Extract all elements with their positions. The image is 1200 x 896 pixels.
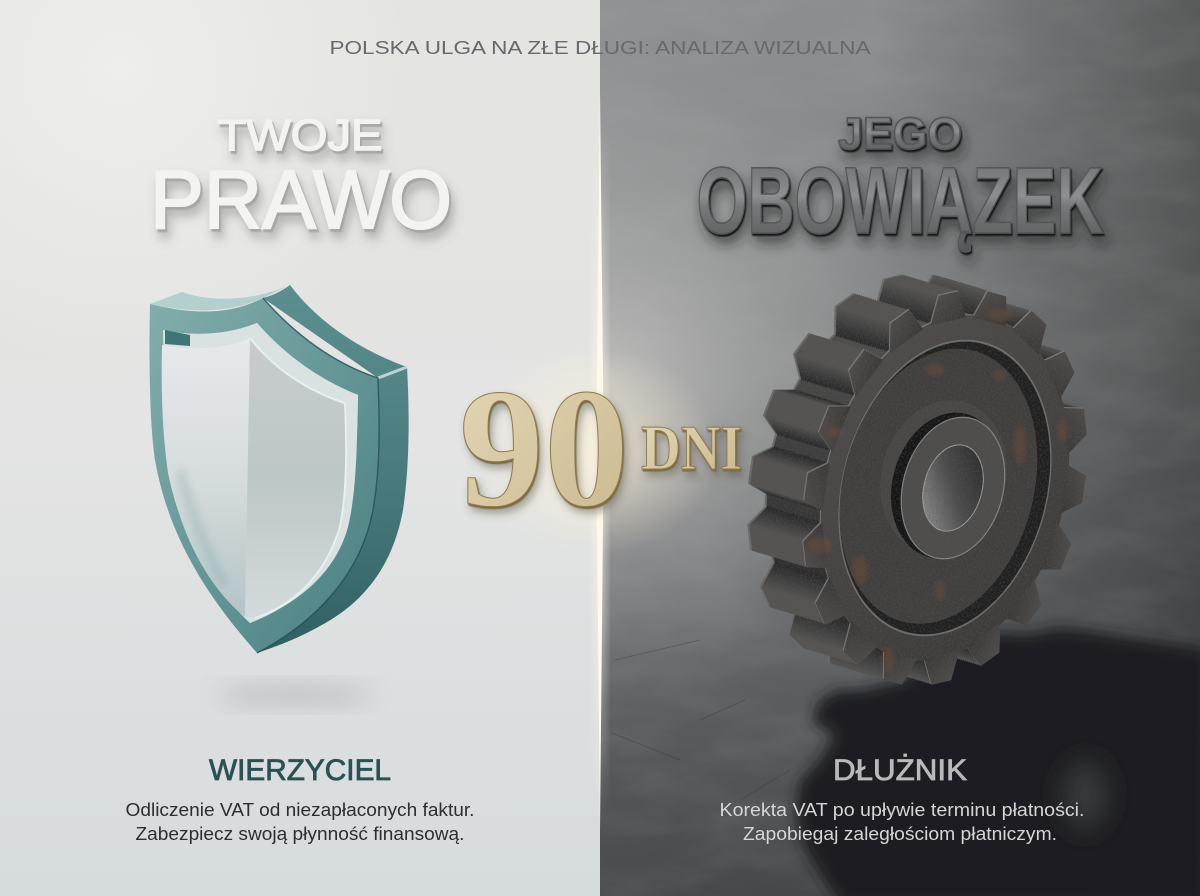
gear rust spots (808, 309, 1068, 672)
gear surface grain (704, 241, 1130, 718)
description: debtor: Zapobiegaj zaległościom płatniczym. (743, 823, 1057, 844)
description: creditor: Odliczenie VAT od niezapłaconych faktur. (126, 799, 474, 820)
shield floor shadow (215, 685, 375, 705)
label: 90 dni: 90 (459, 354, 629, 542)
label: 90 dni (459, 354, 742, 542)
gear recess (808, 317, 1082, 659)
gear hub (863, 386, 1024, 571)
description: debtor: Korekta VAT po upływie terminu płatności. (720, 799, 1084, 820)
heading: twoje prawo: TWOJE (218, 111, 382, 160)
shield side extrusion (257, 285, 409, 653)
gear extruded body (704, 241, 1128, 717)
heading: twoje prawo (150, 111, 452, 246)
description: creditor (126, 799, 474, 844)
icon: gear shadow on floor (795, 628, 1200, 896)
shield top bevel (150, 285, 290, 310)
heading: twoje prawo: PRAWO (150, 153, 452, 246)
panel: debtor side background (600, 0, 1200, 896)
title: POLSKA ULGA NA ZŁE DŁUGI: ANALIZA WIZUALNA (330, 38, 870, 58)
shield glass left (162, 338, 250, 617)
shield front frame (150, 298, 379, 653)
heading: dluznik: DŁUŻNIK (833, 754, 967, 787)
center glowing divider (470, 90, 720, 830)
label: 90 dni: DNI (641, 413, 742, 483)
shield inner opening (163, 323, 358, 623)
panel: creditor side background (0, 0, 600, 896)
panel text: creditor (126, 754, 474, 844)
icon: glass shield (150, 285, 409, 705)
gear front face (759, 257, 1129, 717)
panel text: debtor (720, 754, 1084, 844)
heading: jego obowiazek (696, 108, 1104, 254)
heading: jego obowiazek: JEGO (838, 108, 962, 159)
description: debtor (720, 799, 1084, 844)
description: creditor: Zabezpiecz swoją płynność finansową. (136, 823, 464, 844)
icon: rusty gear (704, 241, 1130, 718)
heading: wierzyciel: WIERZYCIEL (209, 754, 391, 787)
shield glass right (245, 338, 346, 618)
